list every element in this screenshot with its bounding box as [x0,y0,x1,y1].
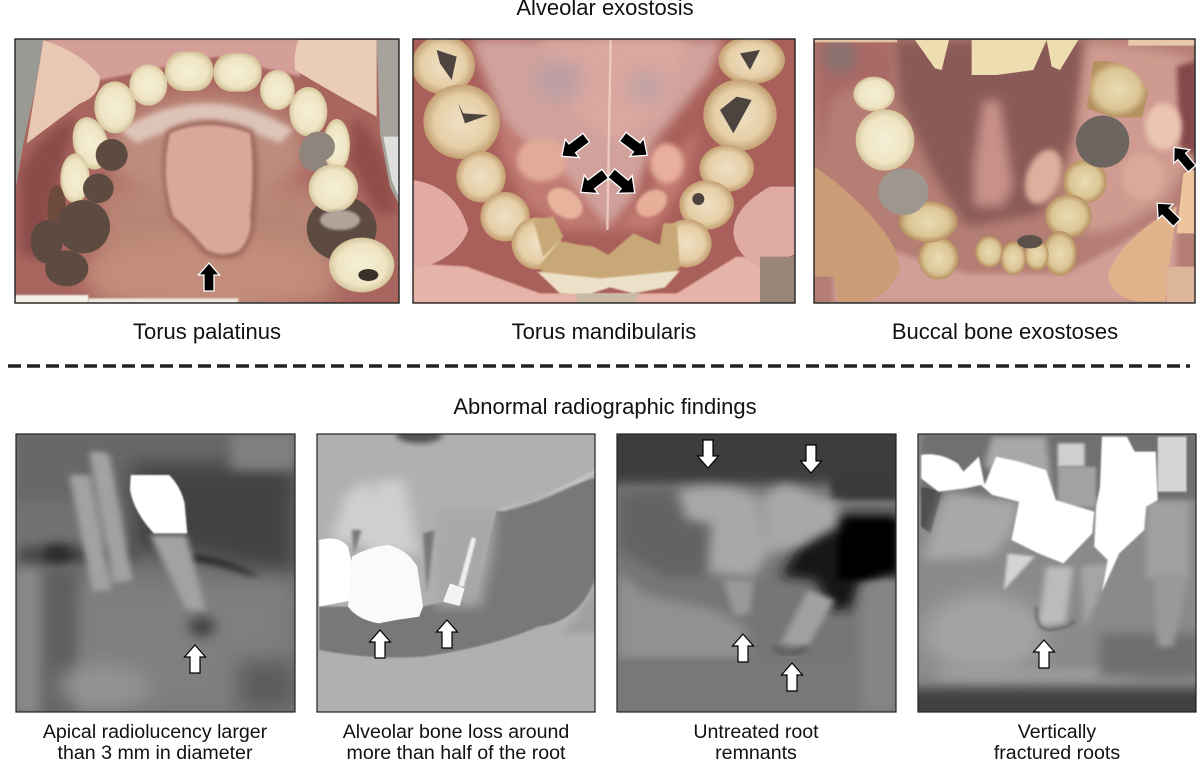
gloves [814,167,900,302]
frame [918,434,1196,712]
frame [617,434,896,712]
arrows [555,128,654,202]
panel: apical radiolucency radiograph [15,433,298,713]
photo frame [814,39,1195,303]
caption: Buccal bone exostoses: Buccal bone exostoses [892,319,1118,344]
lower teeth [853,77,914,171]
frame [16,434,295,712]
torus shadow [162,120,258,259]
panel: untreated root remnants radiograph [616,433,897,713]
torus lobe [166,125,252,254]
caption: vertically fractured roots: Vertically [1018,721,1096,743]
panel: vertically fractured roots radiograph [904,433,1200,722]
caption: Torus mandibularis: Torus mandibularis [512,319,696,344]
arrow [198,263,220,291]
dashed divider [8,364,1190,368]
exostosis bumps [1145,103,1182,150]
upper teeth [915,40,1078,75]
teeth [412,36,785,269]
arrow [1034,640,1054,668]
caption: alveolar bone loss: Alveolar bone loss around [343,721,569,743]
arrows [370,620,458,658]
caption: untreated root remnants: Untreated root [693,721,819,743]
panel: torus mandibularis photo [412,36,800,303]
floor of mouth [470,39,723,230]
photo frame [413,39,795,303]
arrows [1150,141,1200,230]
panel: buccal bone exostoses photo [814,39,1200,303]
arrows [698,440,822,691]
panel: torus palatinus photo [15,39,400,310]
caption: apical radiolucency: Apical radiolucency larger [43,721,268,743]
arrow [184,645,206,673]
caption: Torus palatinus: Torus palatinus [133,319,281,344]
lip and gloves [413,257,797,303]
panel: alveolar bone loss radiograph [317,427,600,713]
photo frame [15,39,399,303]
frame [317,434,595,712]
heading: Abnormal radiographic findings: Abnormal radiographic findings [453,394,757,419]
